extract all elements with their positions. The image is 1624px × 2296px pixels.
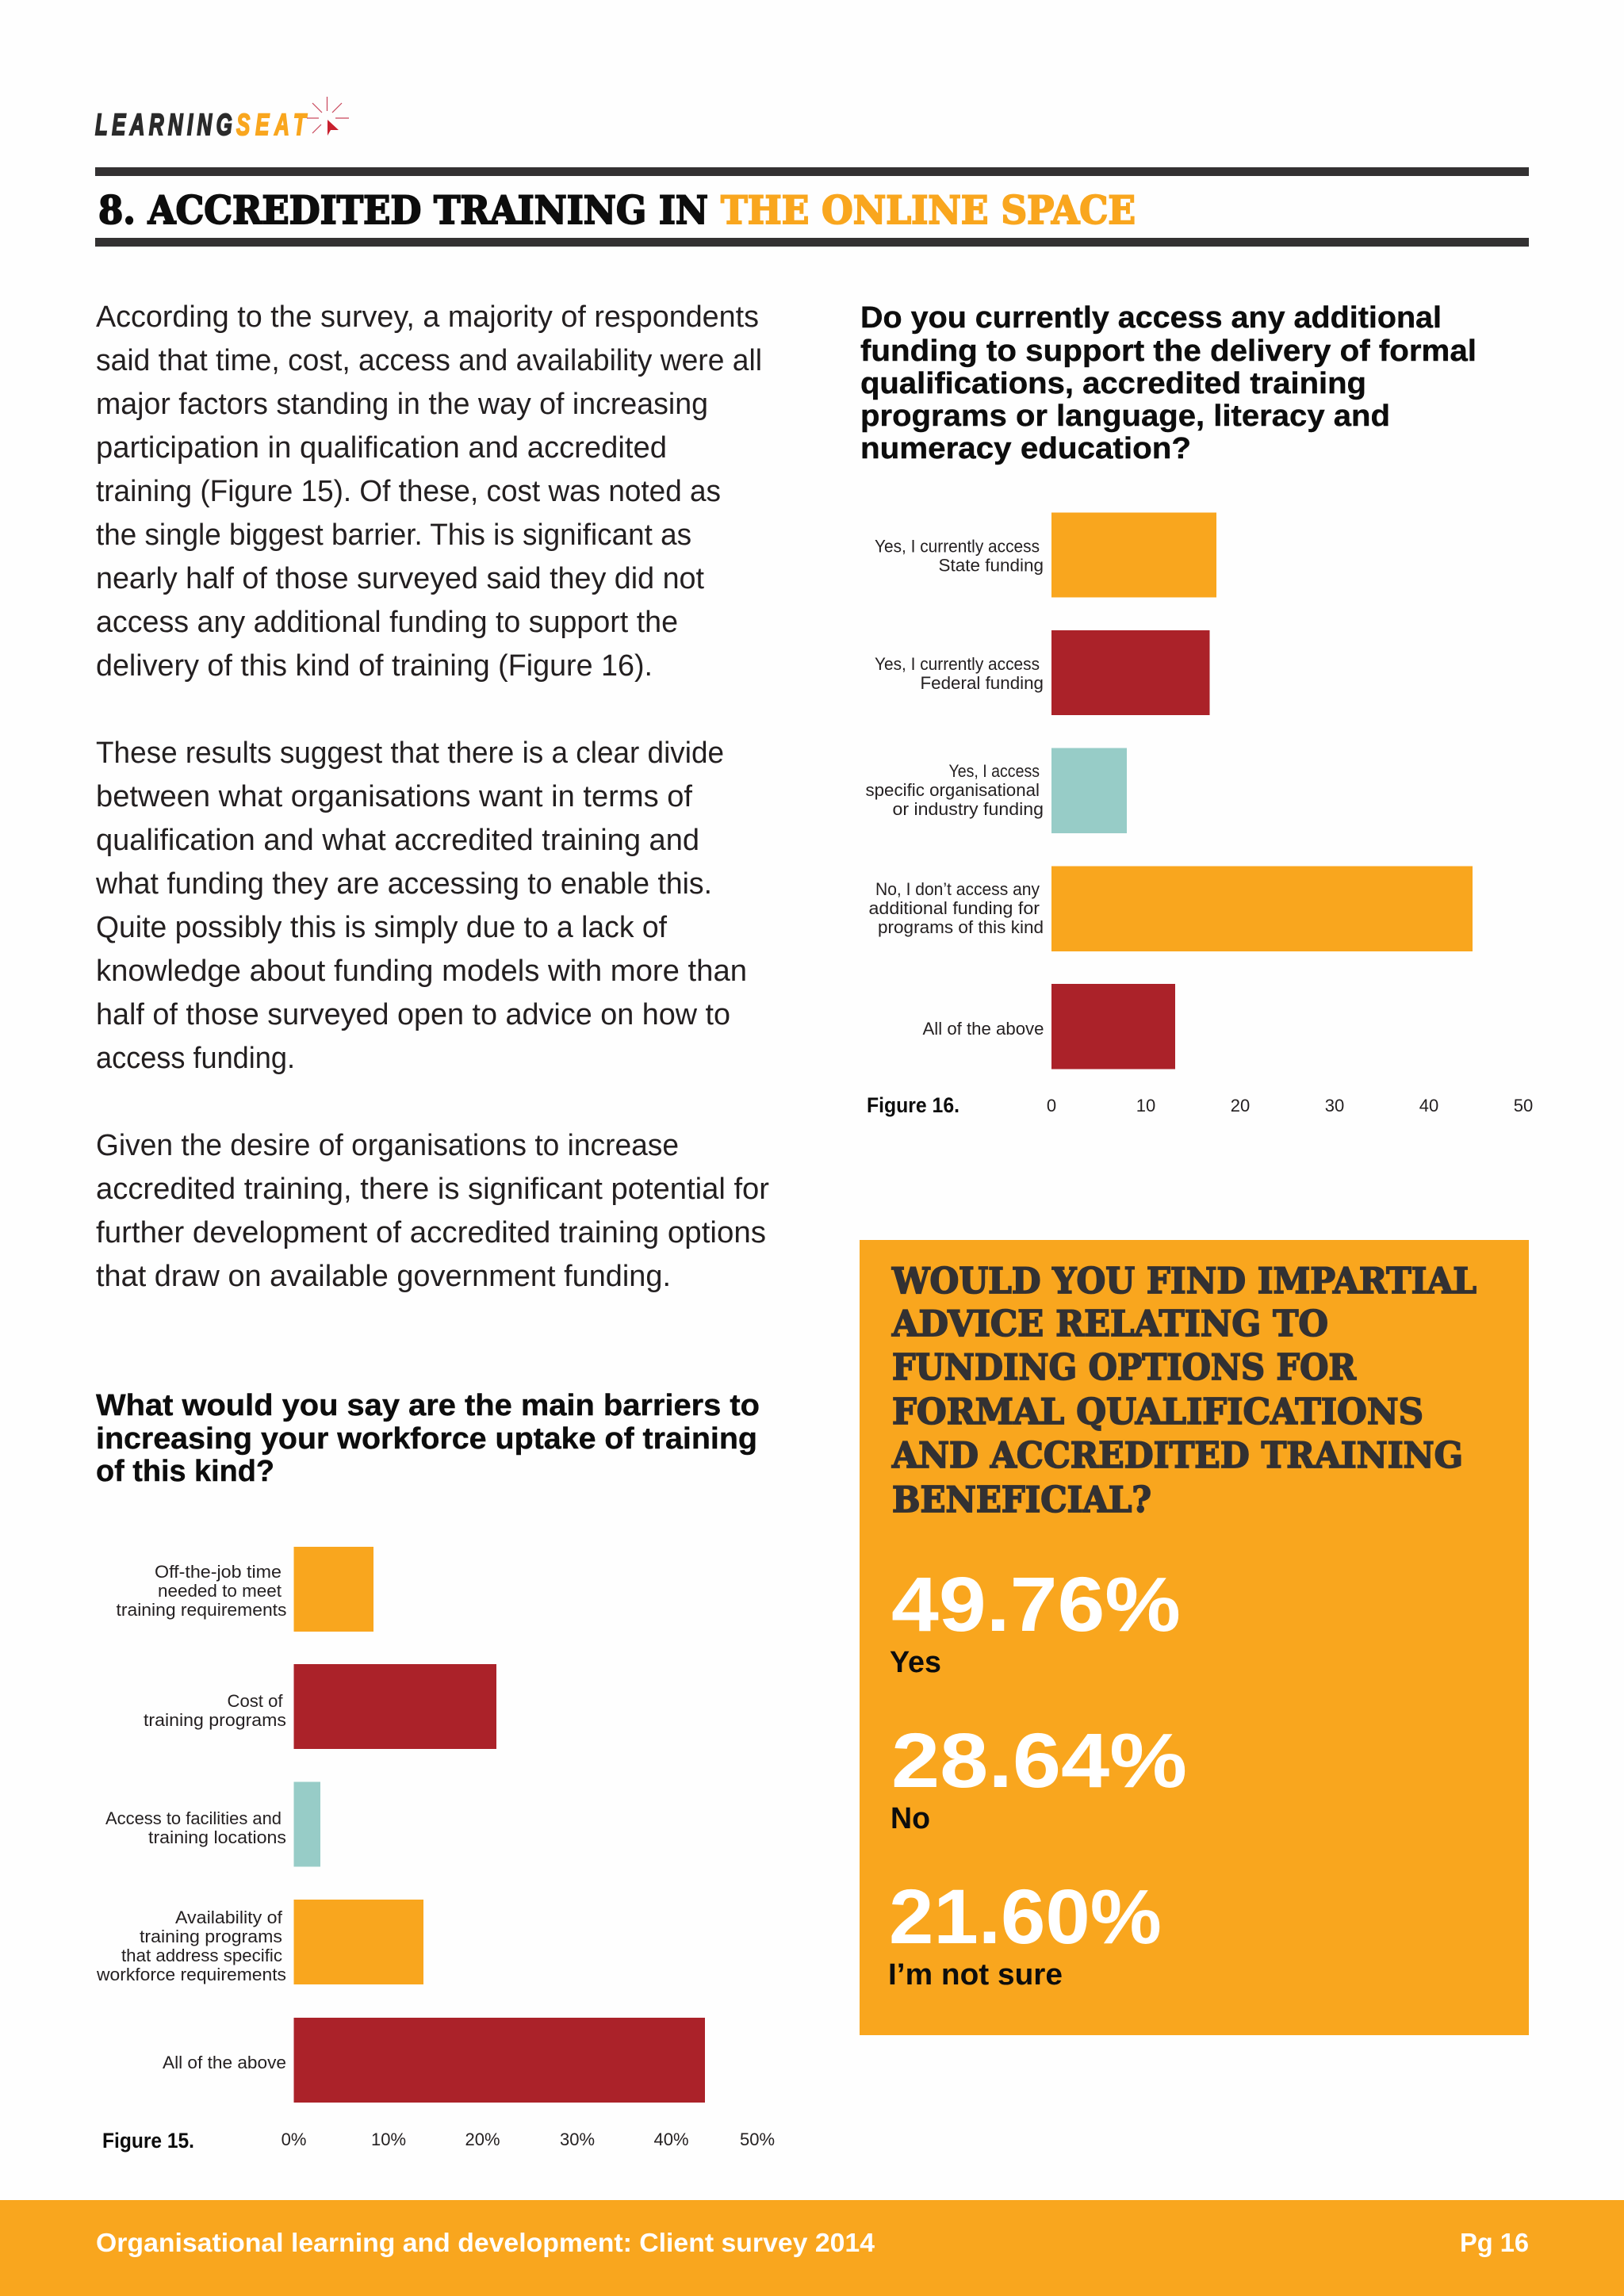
stat: yes: 49.76%: [891, 1561, 1181, 1647]
category labels: needed to meet: [158, 1581, 282, 1601]
callout heading: ADVICE RELATING TO: [891, 1303, 1328, 1345]
axis labels: 0: [1047, 1096, 1056, 1115]
axis labels: 40%: [653, 2130, 689, 2149]
category labels: training programs: [140, 1927, 282, 1946]
bars: [293, 1547, 705, 2103]
callout heading: FUNDING OPTIONS FOR: [892, 1346, 1357, 1388]
heading: figure 16 question: [860, 301, 1477, 465]
axis labels: 0%: [282, 2130, 306, 2149]
axis labels: [1047, 1096, 1533, 1115]
header rule top: [95, 167, 1529, 176]
category labels: additional funding for: [869, 898, 1040, 918]
category labels: State funding: [939, 555, 1044, 576]
axis labels: [282, 2130, 775, 2149]
body text: qualification and what accredited training and: [96, 824, 699, 857]
category labels: Availability of: [175, 1908, 283, 1927]
body text: training (Figure 15). Of these, cost was noted as: [96, 475, 721, 508]
stat: no: No: [891, 1802, 930, 1835]
axis labels: 50: [1514, 1096, 1533, 1115]
header rule bottom: [95, 238, 1529, 247]
body text: the single biggest barrier. This is significant as: [96, 519, 691, 552]
title: THE ONLINE SPACE: [721, 187, 1136, 233]
heading: figure 16 question: funding to support the delivery of formal: [860, 335, 1477, 368]
category labels: workforce requirements: [96, 1965, 286, 1984]
stat: yes: [890, 1561, 1181, 1679]
heading: figure 16 question: numeracy education?: [860, 432, 1191, 465]
category labels: No, I don’t access any: [875, 879, 1040, 899]
axis labels: 20%: [465, 2130, 500, 2149]
body text: access funding.: [96, 1042, 295, 1075]
logo: Learning Seat: LEARNING: [95, 108, 232, 141]
logo: Learning Seat: [95, 97, 349, 141]
body text: between what organisations want in terms of: [96, 780, 692, 813]
body text: According to the survey, a majority of respondents: [96, 300, 759, 334]
figure caption: Figure 16.: [867, 1093, 959, 1117]
body text: accredited training, there is significant potential for: [96, 1173, 769, 1206]
bars: [1051, 512, 1473, 1069]
category labels: [96, 1562, 287, 2072]
category labels: Off-the-job time: [155, 1562, 282, 1582]
body text: Quite possibly this is simply due to a lack of: [96, 911, 667, 944]
category labels: Federal funding: [920, 673, 1044, 693]
body text: knowledge about funding models with more than: [96, 955, 747, 988]
body text: said that time, cost, access and availability were all: [96, 344, 762, 377]
stat: not sure: I’m not sure: [888, 1958, 1063, 1992]
figure caption: Figure 15.: [102, 2129, 194, 2152]
axis labels: 30%: [560, 2130, 595, 2149]
logo: Learning Seat: SEAT: [236, 108, 308, 141]
callout heading: BENEFICIAL?: [892, 1479, 1151, 1521]
category labels: All of the above: [163, 2053, 286, 2072]
callout heading: FORMAL QUALIFICATIONS: [892, 1391, 1423, 1433]
footer band: [0, 2200, 1624, 2296]
axis labels: 10: [1136, 1096, 1155, 1115]
category labels: Cost of: [227, 1691, 283, 1711]
callout heading: WOULD YOU FIND IMPARTIAL: [891, 1260, 1477, 1302]
heading: figure 15 question: of this kind?: [96, 1455, 274, 1488]
category labels: Yes, I currently access: [875, 536, 1040, 557]
heading: figure 15 question: What would you say are the main barriers to: [96, 1389, 760, 1422]
body text: participation in qualification and accredited: [96, 431, 667, 465]
footer title: Organisational learning and development: Client survey 2014: [96, 2228, 875, 2257]
body text: further development of accredited training options: [96, 1216, 766, 1249]
stat: no: [891, 1717, 1187, 1835]
category labels: specific organisational: [866, 780, 1040, 800]
axis labels: 30: [1325, 1096, 1344, 1115]
body text: major factors standing in the way of increasing: [96, 388, 708, 421]
body text: what funding they are accessing to enable this.: [95, 867, 712, 901]
category labels: training requirements: [116, 1600, 287, 1620]
stat: not sure: 21.60%: [889, 1873, 1162, 1960]
title: [98, 187, 1136, 233]
axis labels: 50%: [740, 2130, 775, 2149]
body text: [95, 300, 769, 1293]
category labels: programs of this kind: [878, 917, 1044, 937]
body text: half of those surveyed open to advice on how to: [96, 998, 730, 1031]
heading: figure 16 question: programs or language, literacy and: [860, 400, 1390, 433]
bar chart: figure 15: [96, 1547, 775, 2152]
axis labels: 10%: [371, 2130, 406, 2149]
stat: yes: Yes: [890, 1646, 941, 1679]
axis labels: 40: [1419, 1096, 1438, 1115]
category labels: Access to facilities and: [105, 1808, 282, 1828]
heading: figure 15 question: increasing your workforce uptake of training: [96, 1422, 757, 1456]
category labels: [866, 536, 1044, 1039]
heading: figure 16 question: Do you currently access any additional: [860, 301, 1442, 335]
category labels: or industry funding: [893, 799, 1044, 819]
callout heading: AND ACCREDITED TRAINING: [891, 1434, 1463, 1476]
stat: no: 28.64%: [891, 1717, 1187, 1804]
body text: access any additional funding to support the: [96, 606, 678, 639]
axis labels: 20: [1231, 1096, 1250, 1115]
page number: Pg 16: [1460, 2228, 1529, 2257]
category labels: Yes, I access: [948, 761, 1040, 781]
category labels: All of the above: [923, 1019, 1044, 1039]
body text: nearly half of those surveyed said they did not: [96, 562, 704, 595]
body text: These results suggest that there is a clear divide: [96, 737, 724, 770]
bar chart: figure 16: [866, 512, 1533, 1117]
category labels: training programs: [144, 1710, 286, 1730]
callout heading: [891, 1260, 1477, 1521]
heading: figure 16 question: qualifications, accredited training: [860, 367, 1366, 400]
stat: not sure: [888, 1873, 1162, 1992]
category labels: training locations: [148, 1827, 286, 1847]
title: 8. ACCREDITED TRAINING IN: [98, 187, 708, 233]
heading: figure 15 question: [96, 1389, 760, 1488]
body text: that draw on available government funding.: [96, 1260, 671, 1293]
body text: Given the desire of organisations to increase: [96, 1129, 679, 1162]
panel: impartial advice callout: [860, 1240, 1529, 2035]
category labels: that address specific: [121, 1946, 282, 1965]
body text: delivery of this kind of training (Figure 16).: [96, 649, 653, 683]
category labels: Yes, I currently access: [875, 654, 1040, 674]
